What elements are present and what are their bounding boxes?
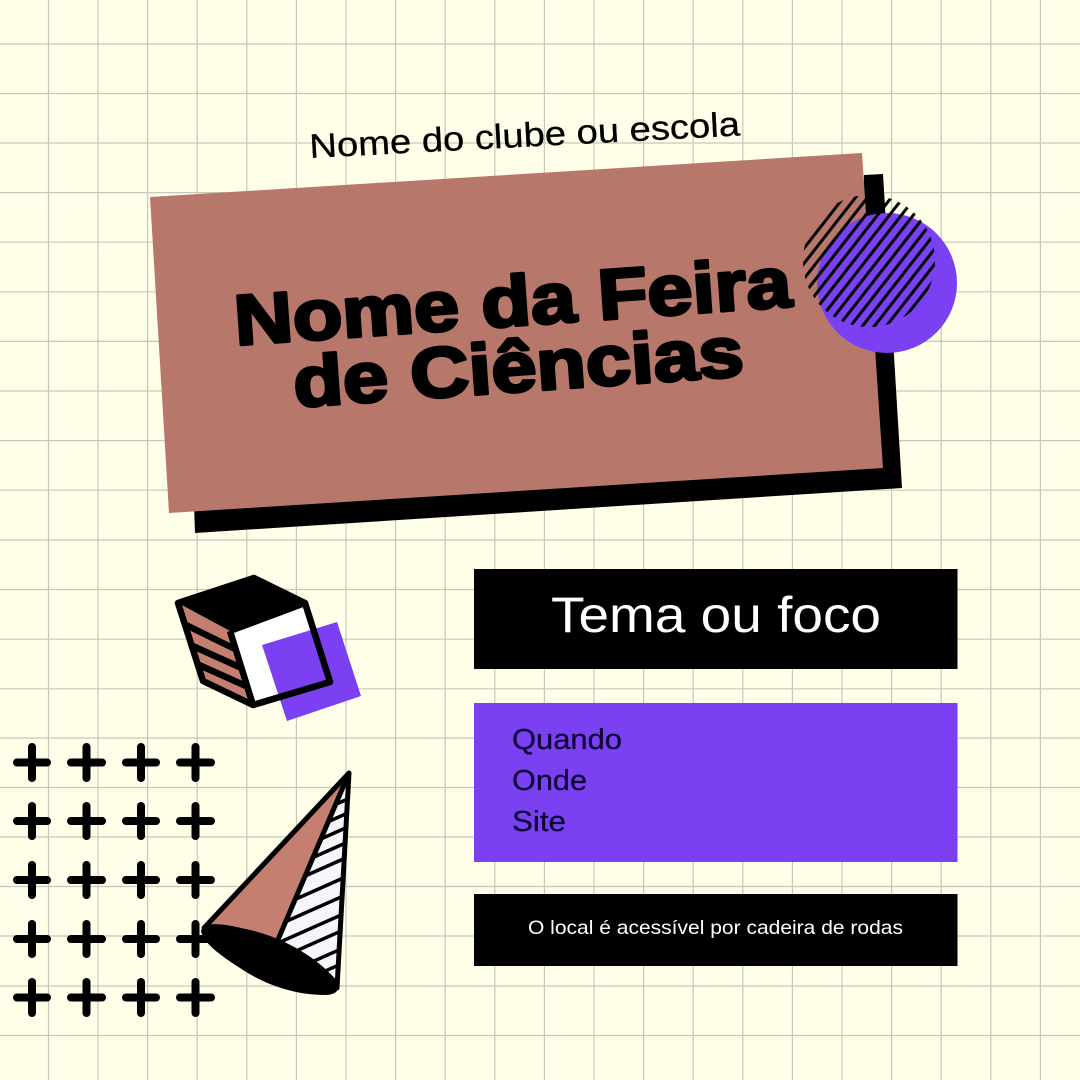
panel: event details: Onde — [512, 765, 587, 797]
title: de Ciências — [291, 313, 746, 423]
icon: grid of plus signs — [17, 747, 211, 1013]
panel: accessibility note — [474, 894, 958, 966]
panel: event details: Site — [512, 806, 566, 838]
panel: theme: Tema ou foco — [551, 587, 881, 643]
panel: accessibility note: O local é acessível por cadeira de rodas — [528, 917, 903, 939]
title — [232, 243, 794, 423]
panel: theme — [474, 569, 958, 669]
icon: purple circle with hatching — [803, 195, 957, 353]
title panel shadow — [194, 174, 902, 533]
subtitle: club or school name: Nome do clube ou escola — [308, 105, 741, 166]
icon: striped cone — [201, 773, 350, 1015]
title panel — [150, 153, 883, 513]
title: Nome da Feira — [232, 243, 794, 361]
panel: event details — [474, 703, 958, 862]
icon: cube with purple square — [178, 578, 361, 721]
panel: event details: Quando — [512, 724, 622, 756]
